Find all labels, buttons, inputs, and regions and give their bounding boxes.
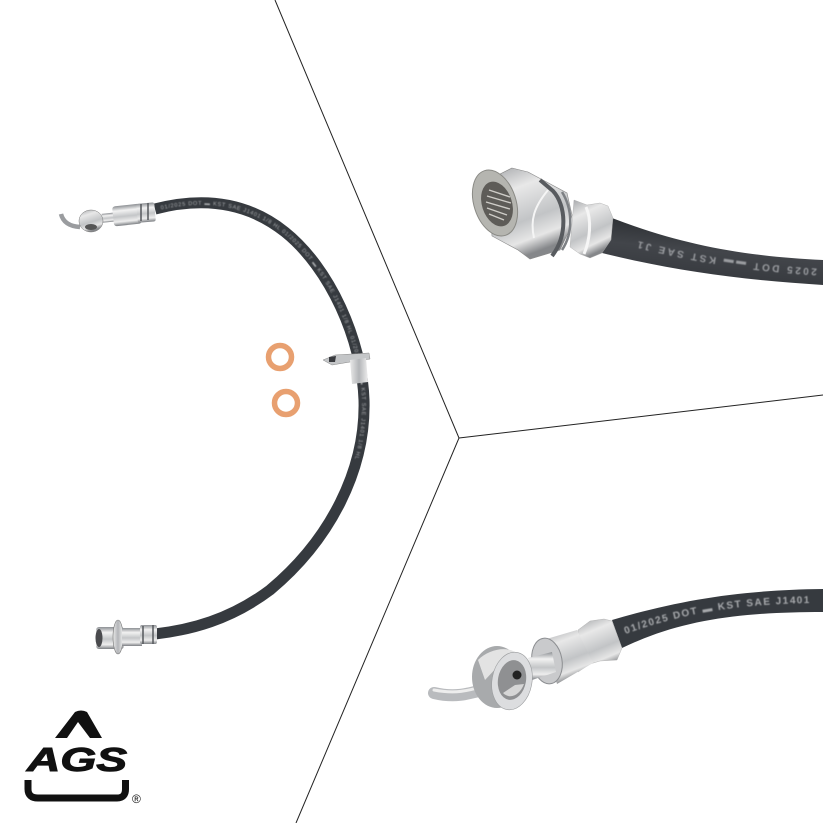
full brake hose assembly: [58, 197, 370, 654]
hose body: [155, 203, 364, 634]
hose markings: 01/2025 DOT ▬ KST SAE J1401: [624, 596, 810, 634]
registered mark: ®: [132, 792, 141, 806]
hose markings: 2025 DOT ▬▬ KST SAE J1: [638, 240, 818, 276]
internal thread: [486, 190, 511, 220]
logo bottom tray: [28, 780, 126, 798]
banjo ring: [472, 646, 522, 708]
close-up: banjo fitting: [428, 589, 823, 710]
hook tube: [434, 689, 486, 695]
close-up: threaded fitting: [472, 168, 823, 285]
mounting bracket: [323, 353, 370, 384]
copper washers: [268, 346, 298, 414]
fitting mouth: [465, 164, 525, 242]
hex nut: [488, 168, 572, 259]
crimp collar: [570, 200, 613, 258]
hose: [602, 218, 823, 285]
divider lines: [275, 0, 823, 823]
AGS logo: [26, 710, 141, 806]
top banjo fitting: [61, 202, 156, 232]
tube: [528, 652, 556, 680]
crimp collar: [578, 619, 622, 672]
bottom threaded fitting: [96, 620, 157, 654]
hose markings: 01/2025 DOT ▬ KST SAE J1401 1/8 HL 01/2025 DOT ▬ KST SAE J1401 1/8 HL 01/2025 DOT ▬ KST SAE J1401 1/8 HL: [160, 200, 366, 459]
logo top chevron: [55, 710, 102, 738]
logo wordmark: AGS: [26, 741, 127, 778]
hose: [612, 589, 823, 648]
